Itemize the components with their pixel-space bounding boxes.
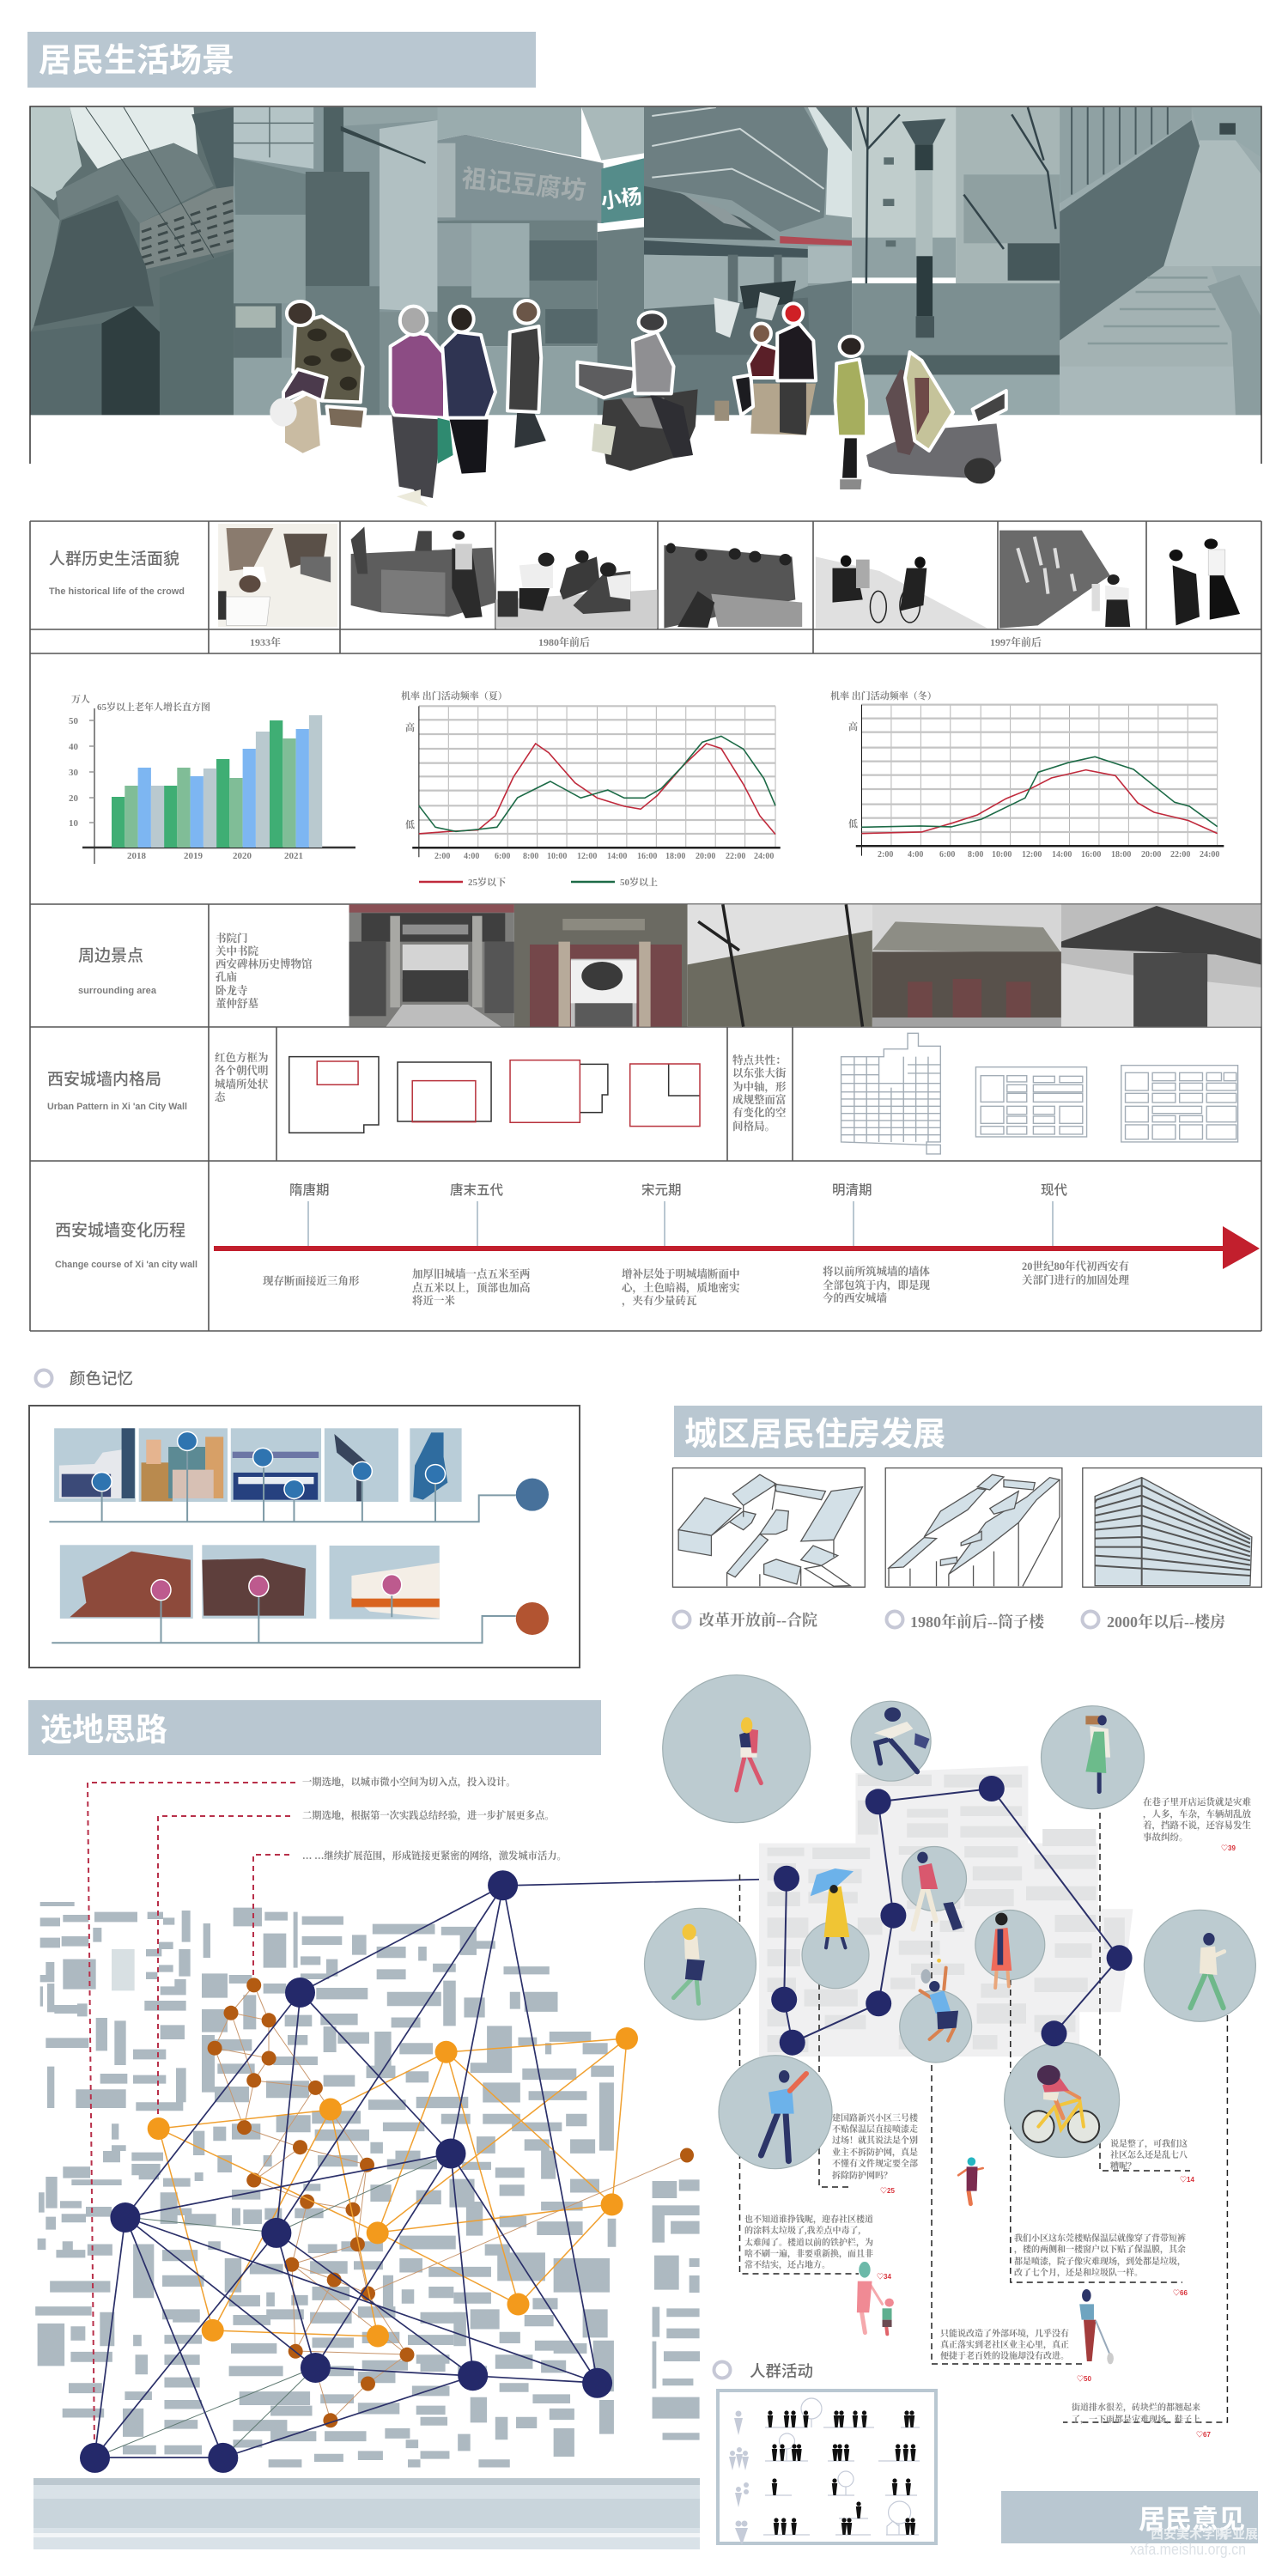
housing diagrams <box>672 1468 1261 1587</box>
photo dates: 1980年前后 <box>538 635 590 648</box>
line chart: winter outing frequency: 10:00 <box>992 850 1012 860</box>
line chart: winter outing frequency: 22:00 <box>1170 850 1190 860</box>
diagram: high-rise <box>1083 1468 1261 1587</box>
line chart: summer outing frequency: 18:00 <box>665 852 685 861</box>
watermark: xafa.meishu.org.cn <box>1130 2541 1246 2558</box>
photo: children playing on slope <box>816 556 987 629</box>
line chart: summer outing frequency: 机率 出门活动频率（夏） <box>401 690 507 702</box>
timeline descriptions: 点五米以上，顶部也加高 <box>412 1281 531 1294</box>
photo: 1933 street portrait <box>218 524 337 627</box>
historical photos strip <box>218 524 1240 629</box>
bar chart: population aged 65+: 40 <box>69 742 79 752</box>
flat illustrated residents <box>673 1707 1224 2161</box>
line chart: winter outing frequency: 14:00 <box>1052 850 1072 860</box>
heading: colour memory <box>36 1370 133 1388</box>
line chart: summer outing frequency: 12:00 <box>577 852 597 861</box>
timeline arrow <box>214 1201 1260 1269</box>
woman in dark coat <box>507 301 546 448</box>
note on common features: 有变化的空 <box>732 1106 787 1119</box>
line chart: winter outing frequency: 18:00 <box>1111 850 1131 860</box>
watermark: 毕业展 <box>1219 2527 1258 2542</box>
resident comment: poor paint: ♡34 <box>877 2273 891 2281</box>
heading: site selection <box>28 1700 601 1755</box>
bar chart: population aged 65+: 20 <box>69 793 79 804</box>
electric tricycle <box>866 352 1006 483</box>
resident comment: insulation skipped: 业主不拆防护网，真是 <box>832 2147 918 2158</box>
photo: two dancers <box>1170 538 1240 625</box>
list of nearby sites: 书院门 <box>216 932 248 945</box>
timeline descriptions: 心，土色暗褐，质地密实 <box>622 1281 740 1294</box>
timeline descriptions: 20世纪80年代初西安有 <box>1022 1260 1130 1273</box>
resident comment: poor paint: 也不知道谁挣钱呢，迎春社区楼道 <box>744 2214 873 2225</box>
resident comment: only exterior improved: ♡50 <box>1077 2375 1091 2383</box>
note on common features <box>732 1054 787 1133</box>
comment figures <box>857 2157 1114 2364</box>
figure: traveller with suitcase <box>913 1852 963 1930</box>
woman in purple <box>391 307 445 507</box>
resident comment: drainage <box>1072 2402 1211 2439</box>
resident comment: drainage: 街道排水很差，砖块烂的都翘起来 <box>1072 2402 1200 2413</box>
row heading: change course of the city wall <box>55 1221 197 1270</box>
resident comment: delivery difficulty: 着，挡路不说，还容易发生 <box>1143 1820 1251 1831</box>
line chart: summer outing frequency: 14:00 <box>607 852 627 861</box>
timeline descriptions: 将近一米 <box>412 1294 456 1307</box>
note on red frames: 城墙所处状 <box>215 1078 269 1091</box>
chart legend <box>419 876 658 888</box>
row heading: surrounding area: surrounding area <box>78 986 157 996</box>
resident comment: only exterior improved: 便捷于老百姓的设施却没有改进。 <box>940 2350 1069 2361</box>
heading: urban housing development <box>674 1406 1262 1457</box>
resident comment: still messy <box>1110 2138 1194 2184</box>
resident comment: renovation took months: 我们小区这东莞楼贴保温层就像穿了背带短裤 <box>1014 2233 1186 2244</box>
row heading: historical life of the crowd: The historical life of the crowd <box>49 586 185 597</box>
tile collage: blue bus <box>233 1452 319 1500</box>
list of nearby sites <box>216 932 313 1010</box>
resident comment: insulation skipped: ♡25 <box>880 2187 895 2195</box>
bar chart: population aged 65+: 30 <box>69 768 79 778</box>
note on red frames: 态 <box>215 1091 227 1103</box>
figure: running woman <box>874 1707 930 1771</box>
pictogram people <box>768 2410 916 2535</box>
diagram 2 <box>398 1062 491 1122</box>
line chart: summer outing frequency: 10:00 <box>547 852 567 861</box>
ground lines <box>763 2427 920 2535</box>
note on common features: 特点共性： <box>732 1054 787 1066</box>
resident comment: delivery difficulty: ，人多，车杂，车辆胡乱放 <box>1143 1808 1251 1820</box>
housing captions: 1980年前后--筒子楼 <box>910 1613 1046 1631</box>
line chart: winter outing frequency: 20:00 <box>1141 850 1161 860</box>
row heading: urban pattern in Xi'an city wall: Urban Pattern in Xi 'an City Wall <box>47 1102 187 1112</box>
phase descriptions: … …继续扩展范围，形成链接更紧密的网络，激发城市活力。 <box>302 1850 567 1862</box>
row heading: change course of the city wall: Change course of Xi 'an city wall <box>55 1260 197 1270</box>
photo: men crouching <box>495 550 658 629</box>
tile collage: red houses and bus <box>70 1552 440 1619</box>
resident comment: renovation took months: 改了七个月，还是和垃圾队一样。 <box>1014 2267 1143 2278</box>
site map with buildings <box>35 1902 700 2468</box>
list of nearby sites: 西安碑林历史博物馆 <box>216 957 313 970</box>
wall outline diagrams <box>289 1057 700 1133</box>
line chart: winter outing frequency: 高 <box>848 720 858 732</box>
resident comment: drainage: ♡67 <box>1196 2431 1211 2439</box>
chart legend: 50岁以上 <box>620 876 658 888</box>
figure: woman in plum dress <box>958 2157 983 2204</box>
plan 2 <box>975 1067 1087 1137</box>
line chart: summer outing frequency: 22:00 <box>726 852 745 861</box>
photo: pavilion <box>1061 904 1261 1027</box>
photo: old brick wall <box>688 904 872 1027</box>
line chart: summer outing frequency: 4:00 <box>464 852 479 861</box>
navy network <box>80 1870 786 2473</box>
timeline period labels: 现代 <box>1041 1182 1068 1198</box>
line chart: summer outing frequency: 低 <box>405 818 415 830</box>
list of nearby sites: 孔庙 <box>216 970 238 983</box>
diagram 3 <box>510 1060 608 1122</box>
timeline descriptions: 加厚旧城墙一点五米至两 <box>412 1267 531 1280</box>
note on red frames: 各个朝代明 <box>215 1064 269 1077</box>
panel: colour memory <box>29 1406 580 1668</box>
row heading: historical life of the crowd: 人群历史生活面貌 <box>49 550 179 568</box>
resident comment: insulation skipped <box>832 2112 919 2195</box>
row heading: urban pattern in Xi'an city wall: 西安城墙内格局 <box>47 1070 161 1089</box>
resident comment: still messy: 糟呢？ <box>1110 2160 1136 2172</box>
trees <box>780 2398 911 2535</box>
watermark: 西安美术学院 <box>1151 2526 1228 2542</box>
timeline descriptions: 全部包筑于内，即是现 <box>823 1279 931 1291</box>
list of nearby sites: 关中书院 <box>216 945 259 957</box>
line chart: summer outing frequency: 20:00 <box>696 852 715 861</box>
line chart: summer outing frequency <box>401 690 781 861</box>
resident comment: insulation skipped: 建国路新兴小区三号楼 <box>832 2112 919 2123</box>
photo dates <box>250 635 1042 648</box>
resident comment: poor paint <box>744 2214 891 2281</box>
note on common features: 为中轴，形 <box>732 1080 787 1093</box>
diagram 4 <box>630 1064 700 1127</box>
line chart: summer outing frequency: 2:00 <box>434 852 450 861</box>
diagram 1 <box>289 1057 379 1133</box>
heritage photos strip <box>349 904 1261 1027</box>
phase descriptions <box>302 1776 567 1862</box>
resident comment: poor paint: 的涂料太垃圾了,我差点中毒了, <box>744 2225 860 2236</box>
blue tiles <box>54 1428 462 1502</box>
resident comment: insulation skipped: 过场！就其说法是个别 <box>832 2135 918 2146</box>
bar chart: population aged 65+: 2021 <box>284 851 303 861</box>
bar chart: population aged 65+: 万人 <box>71 694 90 705</box>
photo: temple hall <box>872 904 1061 1027</box>
row heading: urban pattern in Xi'an city wall <box>47 1070 187 1112</box>
tile collage: buildings <box>59 1428 135 1498</box>
figure: man in blue waving <box>761 2070 806 2161</box>
line chart: summer outing frequency: 高 <box>405 721 415 733</box>
line chart: winter outing frequency: 4:00 <box>908 850 923 860</box>
heading: urban housing development: 城区居民住房发展 <box>684 1417 945 1453</box>
row two tiles <box>60 1545 440 1619</box>
bar chart: population aged 65+: 2020 <box>233 851 252 861</box>
photo: academy gate <box>349 904 514 1027</box>
bar chart: population aged 65+: 50 <box>69 716 79 726</box>
blue markers and leaders <box>49 1431 549 1522</box>
note on common features: 以东张大街 <box>732 1066 787 1079</box>
resident comment: only exterior improved <box>940 2328 1091 2383</box>
bar chart: population aged 65+: 10 <box>69 818 79 829</box>
pink markers and leaders <box>52 1575 549 1643</box>
figure: man with phone <box>1190 1933 1224 2008</box>
housing captions: 改革开放前--合院 <box>699 1612 817 1629</box>
route network <box>771 1776 1133 2056</box>
tile collage: blue sign and figure <box>334 1432 447 1501</box>
right neighbourhood map <box>759 1766 1133 2057</box>
street photo panorama: 祖记豆腐坊 <box>460 164 587 205</box>
plan 1 <box>841 1033 940 1154</box>
timeline descriptions: ，夹有少量砖瓦 <box>622 1294 697 1307</box>
brown network <box>208 1978 694 2427</box>
resident comment: renovation took months: 都是喷漆，院子像灾难现场，到处都是垃圾， <box>1014 2256 1186 2267</box>
timeline period labels: 唐末五代 <box>450 1182 504 1198</box>
bar chart: population aged 65+ <box>69 694 355 864</box>
phase descriptions: 一期选地，以城市微小空间为切入点，投入设计。 <box>302 1776 516 1788</box>
heading: colour memory: 颜色记忆 <box>70 1370 133 1388</box>
phase dashed leaders <box>88 1783 295 2447</box>
figure: ball player <box>920 1959 958 2041</box>
orange network <box>148 2027 638 2348</box>
phase descriptions: 二期选地，根据第一次实践总结经验，进一步扩展更多点。 <box>302 1809 555 1821</box>
row heading: surrounding area: 周边景点 <box>78 946 143 965</box>
resident circles <box>644 1675 1255 2169</box>
heading: crowd activity <box>714 2361 813 2380</box>
resident comment: insulation skipped: 拆除防护网吗？ <box>832 2170 892 2181</box>
resident comment: delivery difficulty: ♡39 <box>1221 1844 1236 1852</box>
resident comment: delivery difficulty: 事故纠纷。 <box>1143 1832 1188 1843</box>
panel: crowd activity <box>718 2391 936 2545</box>
timeline descriptions: 将以前所筑城墙的墙体 <box>823 1265 931 1278</box>
timeline period labels <box>289 1182 1068 1198</box>
cut-out residents <box>270 301 1006 507</box>
timeline period labels: 宋元期 <box>641 1182 682 1198</box>
note on red frames <box>215 1051 269 1103</box>
river band below map <box>33 2478 700 2549</box>
resident comment: still messy: ♡14 <box>1180 2176 1194 2184</box>
map blocks: north-west quarter <box>39 1902 369 2230</box>
line chart: winter outing frequency: 8:00 <box>968 850 983 860</box>
note on common features: 间格局。 <box>732 1120 775 1133</box>
line chart: winter outing frequency: 24:00 <box>1200 850 1219 860</box>
row heading: change course of the city wall: 西安城墙变化历程 <box>55 1221 185 1240</box>
chart legend: 25岁以下 <box>468 876 507 888</box>
title: resident life scenes: 居民生活场景 <box>39 43 234 79</box>
bar chart: population aged 65+: 2018 <box>127 851 146 861</box>
figure: cyclist <box>1023 2065 1099 2142</box>
title: resident life scenes <box>27 32 536 88</box>
timeline period labels: 明清期 <box>832 1182 872 1198</box>
timeline descriptions: 增补层处于明城墙断面中 <box>622 1267 740 1280</box>
resident comment: delivery difficulty <box>1143 1796 1251 1852</box>
resident comment: still messy: 社区怎么还是乱七八 <box>1110 2149 1188 2160</box>
photo: crowd and pool table <box>664 543 802 629</box>
housing captions: 2000年以后--楼房 <box>1107 1613 1225 1631</box>
line chart: winter outing frequency: 低 <box>848 817 858 829</box>
figure: woman with navy bag <box>673 1924 705 2003</box>
heading: residents' opinions <box>1001 2491 1258 2543</box>
figure: woman in red coat <box>991 1913 1012 1988</box>
heading: site selection: 选地思路 <box>40 1712 167 1747</box>
bar chart: population aged 65+: 65岁以上老年人增长直方图 <box>97 701 210 713</box>
line chart: winter outing frequency: 机率 出门活动频率（冬） <box>830 690 937 702</box>
street photo panorama <box>30 106 1261 464</box>
resident comment: only exterior improved: 真正落实到老社区业主心里，真正 <box>940 2339 1069 2350</box>
list of nearby sites: 卧龙寺 <box>216 984 248 997</box>
resident comment: poor paint: 啥不刷一遍，非要重新换，而且非 <box>744 2248 873 2259</box>
line chart: winter outing frequency: 16:00 <box>1081 850 1101 860</box>
timeline descriptions <box>263 1260 1130 1307</box>
plan 3 <box>1121 1066 1238 1142</box>
list of nearby sites: 董仲舒墓 <box>216 997 259 1010</box>
dashed comment connectors <box>740 1792 1227 2422</box>
woman in green <box>835 337 866 489</box>
elderly woman on chair <box>270 301 365 455</box>
watermark <box>1130 2526 1258 2558</box>
bar chart: population aged 65+: 2019 <box>184 851 203 861</box>
resident comment: renovation took months: ，楼的两侧和一楼窗户以下贴了保温膜，其余 <box>1014 2244 1187 2255</box>
note on red frames: 红色方框为 <box>215 1051 269 1064</box>
line chart: summer outing frequency: 24:00 <box>754 852 774 861</box>
resident comment: drainage: 了，一下雨都是灾难现场，鞋子上 <box>1072 2414 1200 2425</box>
heading: crowd activity: 人群活动 <box>750 2362 813 2380</box>
line chart: winter outing frequency: 2:00 <box>878 850 893 860</box>
photo: children climbing the wall <box>999 531 1130 629</box>
line chart: summer outing frequency: 8:00 <box>523 852 538 861</box>
resident comment: poor paint: 常不结实，还占地方。 <box>744 2259 830 2270</box>
note on common features: 成规整而富 <box>732 1093 787 1106</box>
street grid plans <box>841 1033 1238 1154</box>
timeline descriptions: 现存断面接近三角形 <box>263 1274 360 1287</box>
diagram: tube-style buildings <box>885 1468 1062 1587</box>
line chart: winter outing frequency: 6:00 <box>939 850 955 860</box>
woman in navy <box>438 307 495 474</box>
figure: mother and child <box>857 2262 894 2334</box>
row heading: surrounding area <box>78 946 157 996</box>
resident comment: renovation took months <box>1014 2233 1188 2297</box>
photo: red gate <box>514 904 688 1027</box>
street photo panorama: 小杨 <box>599 185 643 214</box>
photo dates: 1997年前后 <box>990 635 1042 648</box>
photo dates: 1933年 <box>250 635 281 648</box>
figure: woman with dog <box>1079 2289 1114 2364</box>
resident comment: poor paint: 太难闻了。楼道以前的铁护栏，为 <box>744 2237 873 2248</box>
category icons <box>729 2411 749 2545</box>
figure: woman with yellow hair <box>737 1717 761 1790</box>
heading: residents' opinions: 居民意见 <box>1139 2505 1245 2535</box>
line chart: winter outing frequency: 12:00 <box>1022 850 1042 860</box>
photo: luggage and men <box>351 526 495 618</box>
resident comment: insulation skipped: 不贴保温层直接喷漆走 <box>832 2123 918 2135</box>
row heading: historical life of the crowd <box>49 550 185 597</box>
seated and standing pair <box>714 303 816 435</box>
figure: shopkeeper in apron <box>1085 1715 1110 1792</box>
resident comment: renovation took months: ♡66 <box>1173 2289 1188 2297</box>
timeline descriptions: 今的西安城墙 <box>823 1291 888 1304</box>
resident comment: still messy: 说是整了，可我们这 <box>1110 2138 1188 2149</box>
resident comment: insulation skipped: 不懂有文件规定要全部 <box>832 2158 918 2169</box>
line chart: summer outing frequency: 16:00 <box>637 852 657 861</box>
map blocks: east edge <box>653 2179 700 2440</box>
housing captions <box>673 1611 1225 1631</box>
timeline descriptions: 关部门进行的加固处理 <box>1022 1273 1130 1286</box>
resident comment: only exterior improved: 只能说改造了外部环境，几乎没有 <box>940 2328 1069 2339</box>
resident comment: delivery difficulty: 在巷子里开店运货就是灾难 <box>1143 1796 1251 1807</box>
table frame lines <box>30 521 1261 1331</box>
line chart: summer outing frequency: 6:00 <box>495 852 510 861</box>
diagram: courtyard houses <box>672 1468 865 1587</box>
motorcycle rider <box>577 312 698 471</box>
map blocks: remaining quarters <box>35 1924 616 2468</box>
line chart: winter outing frequency <box>830 690 1224 860</box>
timeline period labels: 隋唐期 <box>289 1182 330 1198</box>
tile collage: figures <box>142 1437 223 1501</box>
figure: woman with umbrella <box>811 1868 854 1947</box>
